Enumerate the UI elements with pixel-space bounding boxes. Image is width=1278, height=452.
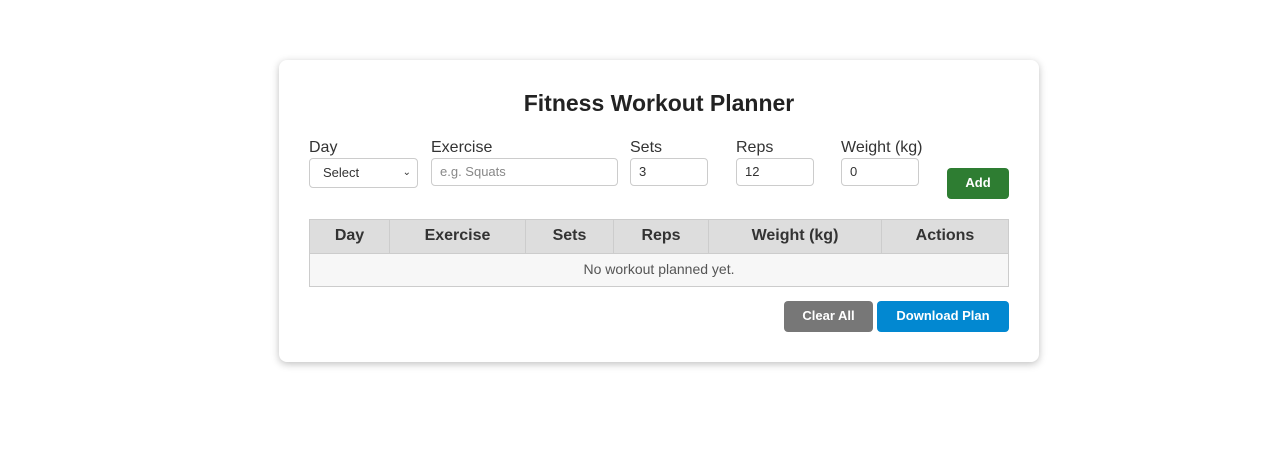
card bbox=[279, 60, 1039, 362]
label: Reps: Reps bbox=[736, 139, 773, 156]
header: Weight bbox=[709, 219, 882, 253]
button: add: Add bbox=[965, 175, 991, 190]
title: Fitness Workout Planner bbox=[524, 90, 794, 116]
label: Day: Day bbox=[309, 139, 337, 156]
input: sets bbox=[630, 158, 708, 186]
header: Exercise: Exercise bbox=[425, 227, 490, 244]
label: Sets: Sets bbox=[630, 139, 662, 156]
input: weight: 0 bbox=[850, 164, 857, 179]
header: Day: Day bbox=[335, 227, 364, 244]
input: reps: 12 bbox=[745, 164, 759, 179]
header: Sets: Sets bbox=[553, 227, 586, 244]
header: Sets bbox=[526, 219, 614, 253]
empty row text: No workout planned yet. bbox=[584, 261, 734, 277]
input: weight bbox=[841, 158, 919, 186]
label: Weight: Weight (kg) bbox=[841, 139, 923, 156]
button: download plan bbox=[877, 301, 1009, 332]
label: Exercise: Exercise bbox=[431, 139, 492, 156]
select: day: Select bbox=[323, 165, 359, 180]
button: clear all bbox=[784, 301, 873, 332]
header: Reps bbox=[614, 219, 709, 253]
button: add bbox=[947, 168, 1009, 199]
table bbox=[309, 219, 1009, 287]
button: download plan: Download Plan bbox=[896, 308, 990, 323]
header: Exercise bbox=[390, 219, 526, 253]
input: reps bbox=[736, 158, 814, 186]
button: clear all: Clear All bbox=[802, 308, 855, 323]
select: day: ⌄ bbox=[403, 167, 411, 178]
header: Reps: Reps bbox=[641, 227, 681, 244]
select: day bbox=[309, 158, 418, 188]
header: Actions: Actions bbox=[916, 227, 974, 244]
header: Day bbox=[310, 219, 390, 253]
header: Weight: Weight (kg) bbox=[752, 227, 838, 244]
input: exercise: e.g. Squats bbox=[440, 164, 506, 179]
input: sets: 3 bbox=[639, 164, 646, 179]
input: exercise bbox=[431, 158, 618, 186]
